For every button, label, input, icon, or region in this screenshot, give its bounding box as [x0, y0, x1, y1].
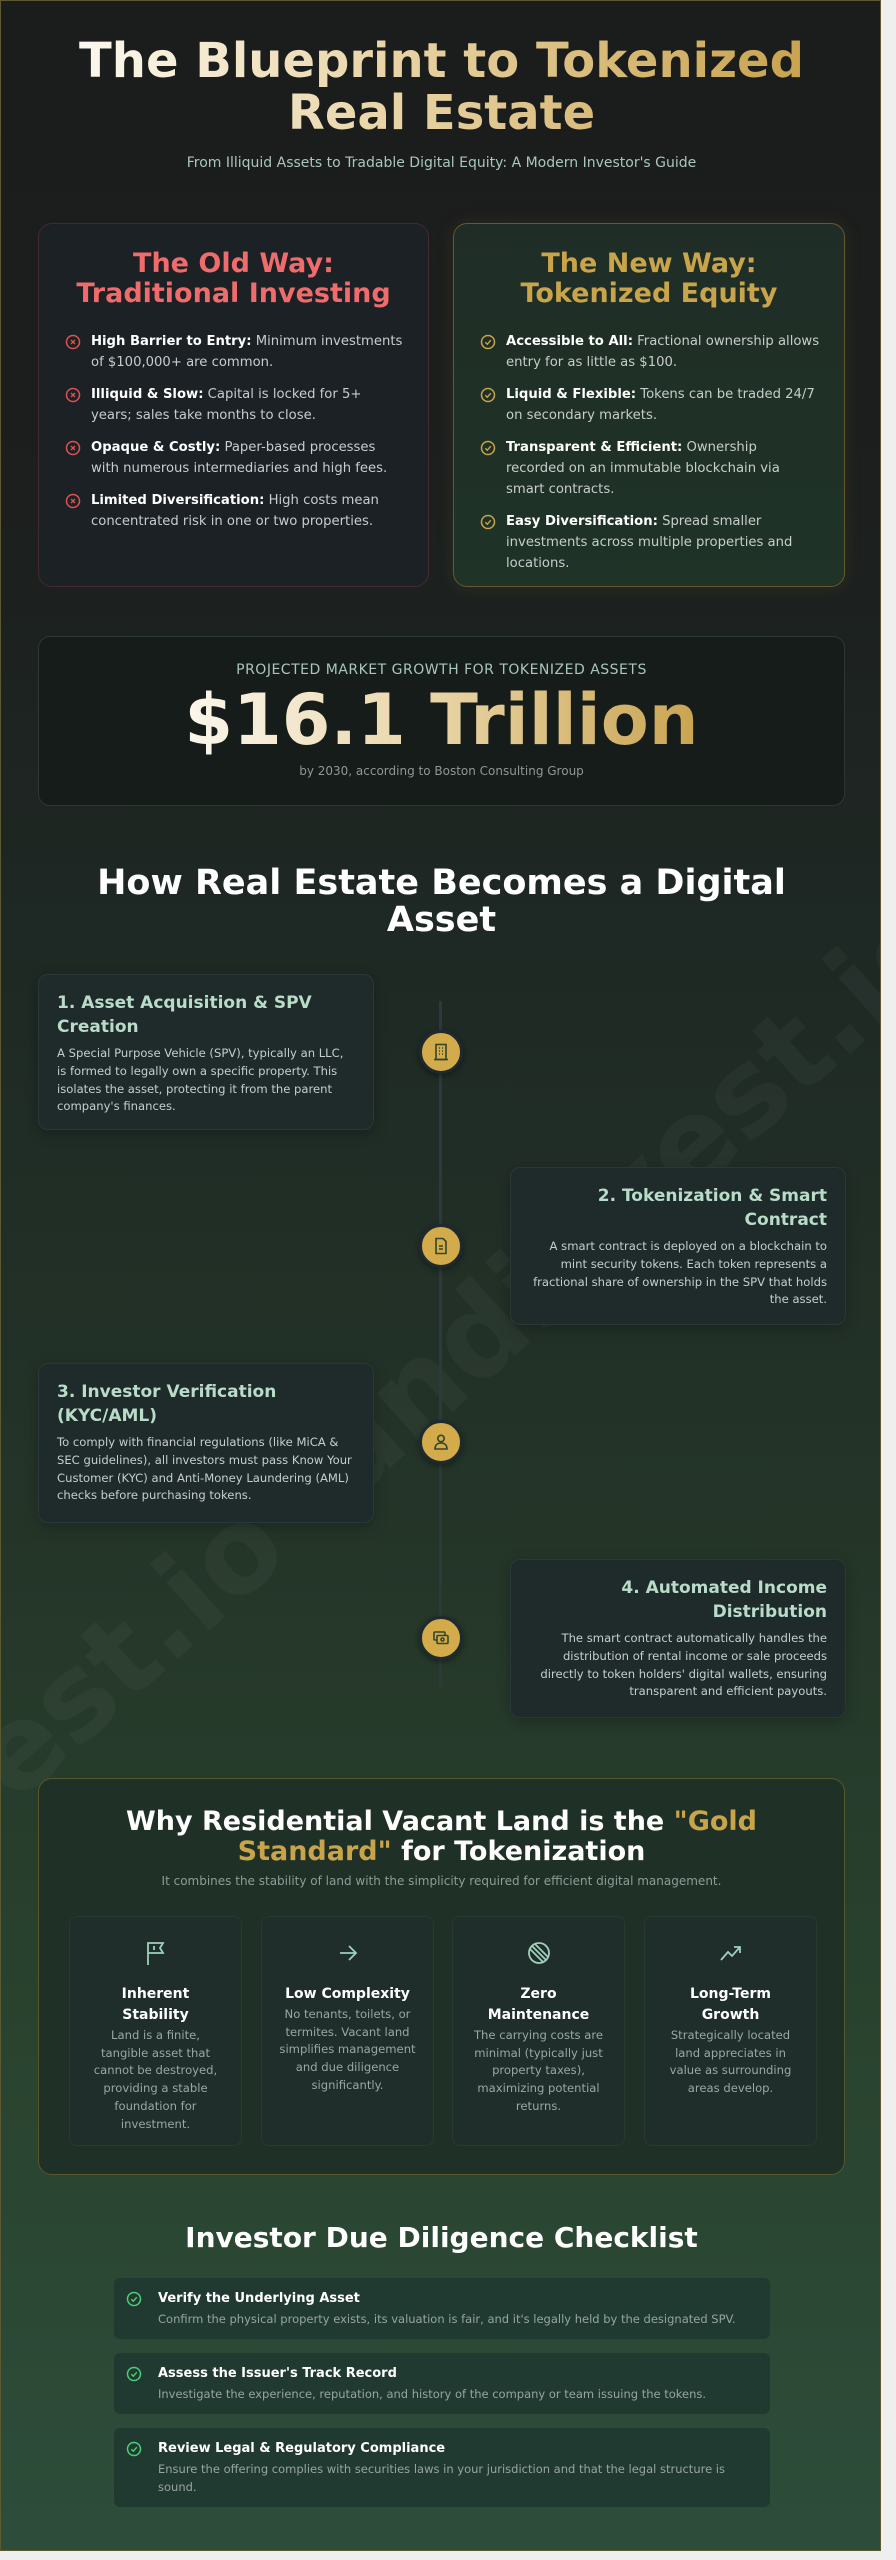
step 2 card: A smart contract is deployed on a blockchain to mint security tokens. Each token represents a fractional share of ownership in the SPV that holds the asset.	[533, 1239, 827, 1306]
heading: gold standard: Standard" for Tokenization	[238, 1836, 645, 1867]
step 3 card: To comply with financial regulations (like MiCA & SEC guidelines), all investors must pass Know Your Customer (KYC) and Anti-Money Laundering (AML) checks before purchasing tokens.	[57, 1435, 352, 1502]
feature: low complexity	[261, 1916, 434, 2146]
checklist item 3	[114, 2428, 770, 2507]
step 1 card: 1. Asset Acquisition & SPV Creation	[57, 993, 312, 1037]
feature: inherent stability: Inherent	[122, 1986, 189, 2002]
item: illiquid: Illiquid & Slow: Capital is locked for 5+	[91, 387, 361, 402]
heading: new way: The New Way:	[541, 248, 757, 279]
checklist item 2: Assess the Issuer's Track Record	[158, 2366, 397, 2381]
item: high barrier: High Barrier to Entry: Minimum investments	[91, 334, 402, 349]
subtitle: From Illiquid Assets to Tradable Digital Equity: A Modern Investor's Guide	[187, 155, 696, 171]
step 2 card: 2. Tokenization & Smart Contract	[598, 1186, 827, 1230]
step 1 card: A Special Purpose Vehicle (SPV), typically an LLC, is formed to legally own a specific property. This isolates the asset, protecting it from the parent company's finances.	[57, 1046, 343, 1113]
step 4 card: The smart contract automatically handles the distribution of rental income or sale proceeds directly to token holders' digital wallets, ensuring transparent and efficient payouts.	[540, 1631, 827, 1698]
checklist item 1	[114, 2278, 770, 2339]
feature: long-term growth: Strategically located land appreciates in value as surrounding areas develop.	[670, 2028, 791, 2095]
item: accessible: Accessible to All: Fractional ownership allows	[506, 334, 819, 349]
title	[1, 35, 882, 139]
step 1 card	[38, 974, 374, 1130]
checklist item 3: sound.	[158, 2480, 197, 2494]
heading: gold standard	[126, 1806, 757, 1867]
item: transparent: smart contracts.	[506, 482, 614, 497]
item: liquid	[480, 387, 815, 423]
heading: process: Asset	[387, 900, 496, 940]
heading: process	[97, 863, 786, 940]
heading: process: How Real Estate Becomes a Digital	[97, 863, 786, 903]
item: accessible: entry for as little as $100.	[506, 355, 677, 370]
item: transparent: Transparent & Efficient: Ownership	[506, 440, 757, 455]
item: easy diversification: locations.	[506, 556, 569, 571]
title: The Blueprint to Tokenized	[79, 33, 804, 89]
item: transparent: recorded on an immutable blockchain via	[506, 461, 780, 476]
checklist item 2: Investigate the experience, reputation, and history of the company or team issuing the tokens.	[158, 2387, 706, 2401]
item: easy diversification	[480, 514, 792, 571]
item: liquid: on secondary markets.	[506, 408, 657, 423]
item: high barrier: of $100,000+ are common.	[91, 355, 273, 370]
item: accessible	[480, 334, 819, 370]
gold subtitle: It combines the stability of land with the simplicity required for efficient digital management.	[162, 1874, 721, 1888]
heading: gold standard: Why Residential Vacant Land is the "Gold	[126, 1806, 757, 1837]
icon: building	[419, 1030, 463, 1074]
feature: low complexity: Low Complexity	[285, 1986, 410, 2002]
heading: old way: The Old Way:	[133, 248, 334, 279]
panel: old way	[38, 223, 429, 587]
item: illiquid: years; sales take months to close.	[91, 408, 316, 423]
heading: old way: Traditional Investing	[76, 278, 391, 309]
feature: long-term growth	[644, 1916, 817, 2146]
icon: person	[419, 1420, 463, 1464]
feature: zero maintenance: Maintenance	[488, 2007, 589, 2023]
feature: low complexity: No tenants, toilets, or termites. Vacant land simplifies management and due diligence significantly.	[279, 2007, 416, 2092]
item: illiquid	[66, 387, 361, 423]
checklist item 3: Ensure the offering complies with securities laws in your jurisdiction and that the legal structure is	[158, 2462, 725, 2476]
panel: new way	[453, 223, 845, 587]
stat callout	[38, 636, 845, 806]
item: opaque	[66, 440, 387, 476]
timeline line	[439, 1001, 442, 1687]
stat number: $16.1 Trillion	[184, 679, 699, 761]
icon: document	[419, 1224, 463, 1268]
checklist item 1: Verify the Underlying Asset	[158, 2291, 360, 2306]
feature: inherent stability: Stability	[122, 2007, 189, 2023]
item: limited diversification: concentrated risk in one or two properties.	[91, 514, 373, 529]
checklist item 3: Review Legal & Regulatory Compliance	[158, 2441, 445, 2456]
feature: zero maintenance: The carrying costs are minimal (typically just property taxes), maximizing potential returns.	[474, 2028, 603, 2113]
feature: zero maintenance	[452, 1916, 625, 2146]
item: transparent	[480, 440, 780, 497]
item: liquid: Liquid & Flexible: Tokens can be traded 24/7	[506, 387, 815, 402]
feature: inherent stability: tangible asset that cannot be destroyed, providing a stable foundation for investment.	[94, 2046, 217, 2131]
feature: zero maintenance: Zero	[520, 1986, 557, 2002]
icon: money	[419, 1616, 463, 1660]
step 4 card	[510, 1559, 846, 1718]
panel: gold standard	[38, 1778, 845, 2175]
step 2 card	[510, 1167, 846, 1325]
feature: inherent stability: Land is a finite,	[111, 2028, 200, 2042]
step 3 card	[38, 1363, 374, 1523]
step 4 card: 4. Automated Income Distribution	[621, 1578, 827, 1622]
heading: checklist: Investor Due Diligence Checklist	[185, 2221, 698, 2254]
stat source: by 2030, according to Boston Consulting Group	[299, 764, 584, 778]
checklist item 1: Confirm the physical property exists, its valuation is fair, and it's legally held by the designated SPV.	[158, 2312, 736, 2326]
feature: long-term growth: Long-Term	[690, 1986, 771, 2002]
item: easy diversification: investments across multiple properties and	[506, 535, 792, 550]
checklist item 2	[114, 2353, 770, 2414]
item: opaque: with numerous intermediaries and high fees.	[91, 461, 387, 476]
feature: long-term growth: Growth	[702, 2007, 759, 2023]
heading: new way: Tokenized Equity	[521, 278, 777, 309]
item: limited diversification	[66, 493, 379, 529]
item: easy diversification: Easy Diversification: Spread smaller	[506, 514, 761, 529]
title: Real Estate	[288, 85, 595, 141]
feature: inherent stability	[69, 1916, 242, 2146]
step 3 card: 3. Investor Verification (KYC/AML)	[57, 1382, 276, 1426]
stat label: PROJECTED MARKET GROWTH FOR TOKENIZED ASSETS	[236, 662, 647, 678]
heading: old way	[76, 248, 391, 309]
item: high barrier	[66, 334, 402, 370]
item: opaque: Opaque & Costly: Paper-based processes	[91, 440, 375, 455]
heading: new way	[520, 248, 777, 309]
item: limited diversification: Limited Diversification: High costs mean	[91, 493, 379, 508]
